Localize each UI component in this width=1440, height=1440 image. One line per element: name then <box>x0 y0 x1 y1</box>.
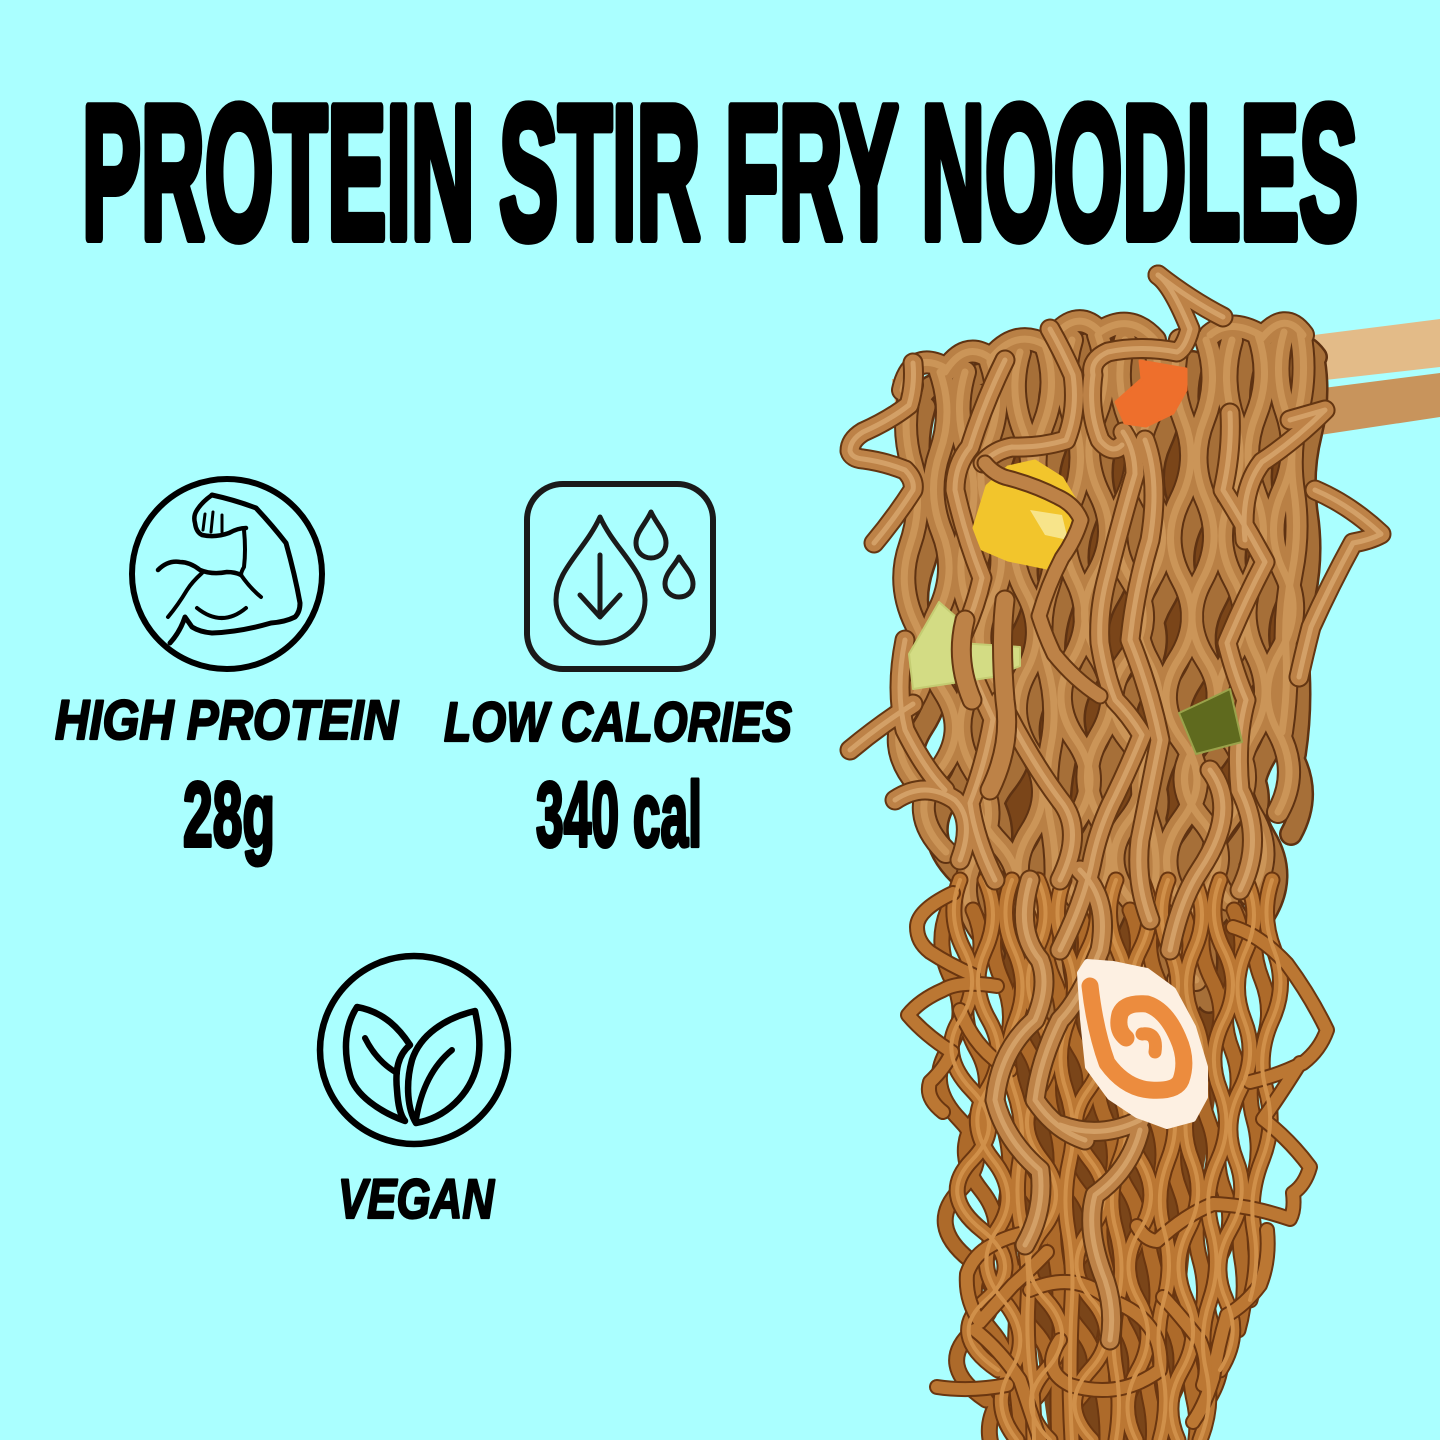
front noodle strands <box>850 275 1381 1340</box>
narutomaki fish cake <box>1080 962 1205 1126</box>
icon: flexed arm in circle <box>132 479 322 669</box>
carrot piece <box>1116 361 1186 426</box>
label: low calories: LOW CALORIES <box>444 690 792 753</box>
icon: droplets with down arrow <box>527 484 713 669</box>
back noodle strands, upper <box>899 321 1317 1014</box>
corn kernel <box>974 461 1083 568</box>
icon: vegan leaves in circle <box>320 956 508 1144</box>
label: high protein: HIGH PROTEIN <box>55 688 399 751</box>
label: vegan: VEGAN <box>338 1167 495 1230</box>
value: 340 cal: 340 cal <box>536 764 702 866</box>
noodle core shadow <box>945 365 1300 1440</box>
cabbage piece <box>909 602 1020 689</box>
zucchini piece <box>1179 689 1242 754</box>
noodle strands, lower <box>908 880 1327 1440</box>
value: 28g: 28g <box>183 764 275 866</box>
noodles on chopsticks photo illustration <box>850 275 1440 1440</box>
strands over vegetables <box>961 463 1100 790</box>
chopsticks <box>892 319 1440 438</box>
